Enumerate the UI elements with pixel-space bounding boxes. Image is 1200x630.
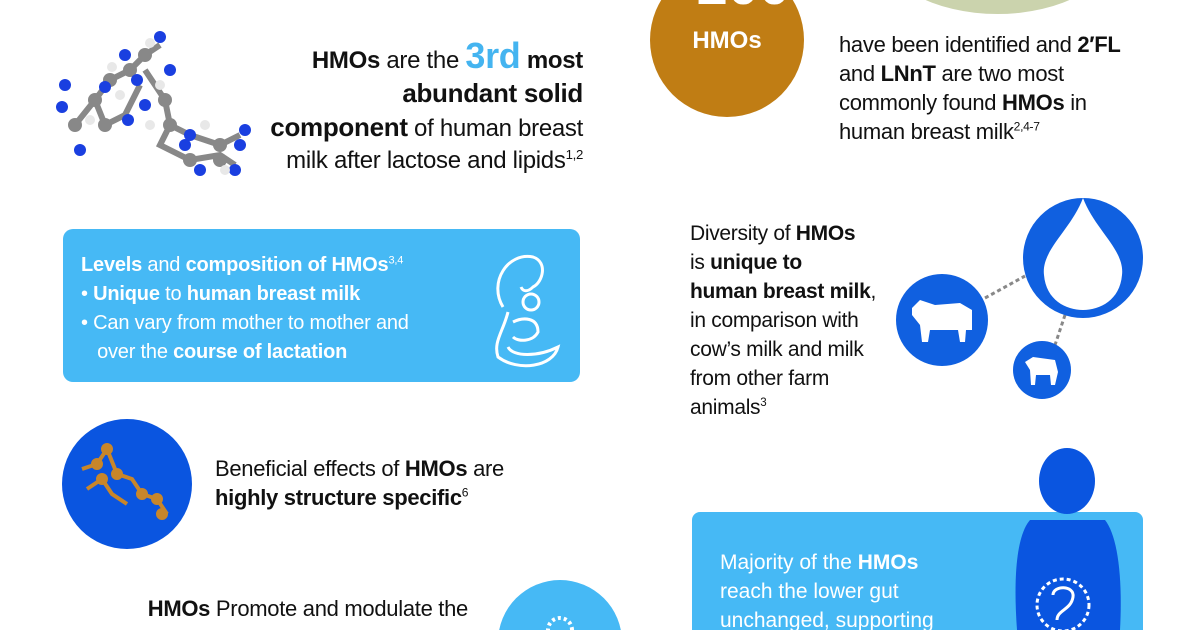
text: diversity: animals3 — [690, 396, 766, 419]
text: beneficial effects — [215, 456, 504, 510]
text: diversity — [690, 222, 876, 419]
text: 200 HMOs identified: human breast milk2,4-7 — [839, 119, 1040, 144]
text: levels: Levels and composition of HMOs3,4 — [81, 254, 403, 276]
text: 200 HMOs identified — [839, 32, 1121, 144]
panel: levels and composition — [63, 229, 580, 382]
text: diversity: human breast milk, — [690, 280, 876, 303]
text: diversity: cow’s milk and milk — [690, 338, 864, 361]
text: levels — [81, 254, 409, 363]
text: levels: • Can vary from mother to mother and — [81, 312, 409, 334]
text: 3rd most abundant: milk after lactose and lipids1,2 — [286, 147, 583, 174]
panel: majority reach lower gut: reach the lower gut — [720, 580, 899, 603]
text: diversity: Diversity of HMOs — [690, 222, 855, 245]
icon: milk drop, cow, sheep — [896, 198, 1143, 399]
text: diversity: in comparison with — [690, 309, 859, 332]
text: diversity: is unique to — [690, 251, 802, 274]
text: 3rd most abundant: HMOs are the 3rd most — [312, 35, 583, 76]
icon: mother and baby — [495, 254, 560, 368]
text: 3rd most abundant — [270, 35, 584, 174]
text: diversity: from other farm — [690, 367, 829, 390]
text: 200 HMOs identified: and LNnT are two most — [839, 61, 1064, 86]
icon: molecule — [56, 31, 251, 176]
text: beneficial effects: highly structure specific6 — [215, 485, 468, 510]
icon: child silhouette — [1016, 448, 1121, 630]
icon: light blue circle bacteria — [499, 580, 621, 630]
text: beneficial effects: Beneficial effects of HMOs are — [215, 456, 504, 481]
text: 3rd most abundant: abundant solid — [402, 78, 583, 108]
icon: brown circle ~200 — [650, 0, 804, 117]
panel: majority reach lower gut: Majority of the HMOs — [720, 551, 918, 574]
panel: majority reach lower gut — [692, 512, 1143, 630]
text: 200 HMOs identified: have been identified and 2′FL — [839, 32, 1121, 57]
shape: sage ellipse — [880, 0, 1115, 14]
text: promote growth: HMOs Promote and modulate the — [148, 596, 468, 621]
text: levels: over the course of lactation — [97, 341, 347, 363]
text: levels: • Unique to human breast milk — [81, 283, 360, 305]
text: 200 HMOs identified: commonly found HMOs in — [839, 90, 1087, 115]
icon: brown circle ~200: HMOs — [692, 27, 762, 54]
text: 3rd most abundant: component of human breast — [270, 112, 583, 142]
icon: blue circle with molecule — [62, 419, 192, 549]
